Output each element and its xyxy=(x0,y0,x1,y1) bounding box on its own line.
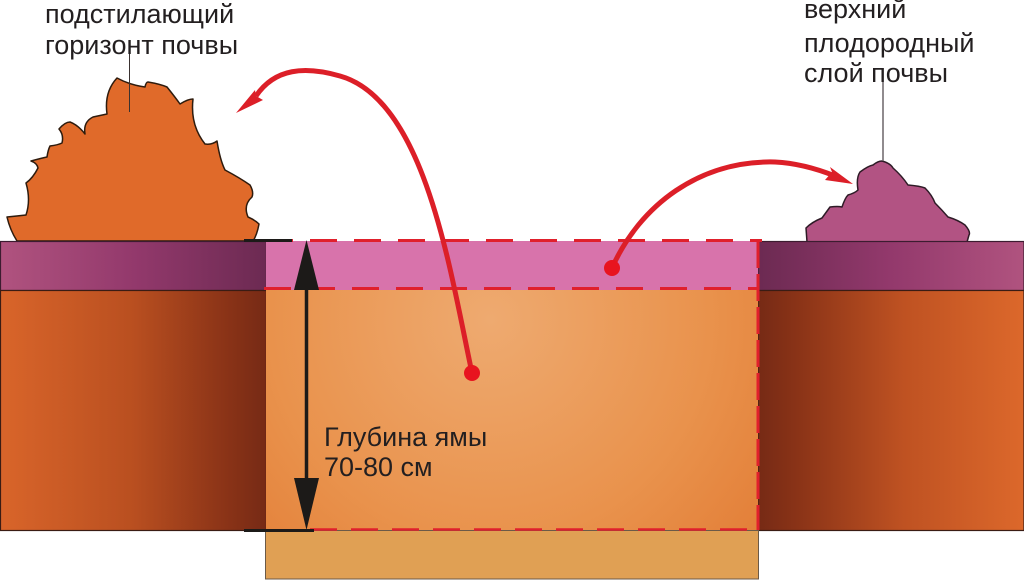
heap: fertile topsoil xyxy=(806,161,970,242)
pit: subsoil layer xyxy=(266,290,758,530)
arrow: subsoil to left heap xyxy=(236,71,480,381)
heap: subsoil horizon xyxy=(7,78,259,241)
left soil block xyxy=(0,242,266,530)
leader line: topsoil label xyxy=(882,82,884,161)
label: fertile topsoil: слой почвы xyxy=(804,58,948,88)
leader line: subsoil label xyxy=(128,52,130,112)
pit dashed outline xyxy=(264,240,762,530)
label: pit depth: 70-80 см xyxy=(324,452,433,482)
depth arrow xyxy=(244,240,319,530)
pit: topsoil layer xyxy=(266,241,758,290)
label: subsoil horizon: горизонт почвы xyxy=(45,30,238,60)
pit bottom layer xyxy=(266,530,758,579)
label: pit depth: Глубина ямы xyxy=(324,422,487,452)
right soil block xyxy=(758,242,1024,530)
label: fertile topsoil: плодородный xyxy=(804,28,974,58)
arrow: topsoil to right heap xyxy=(604,162,853,276)
